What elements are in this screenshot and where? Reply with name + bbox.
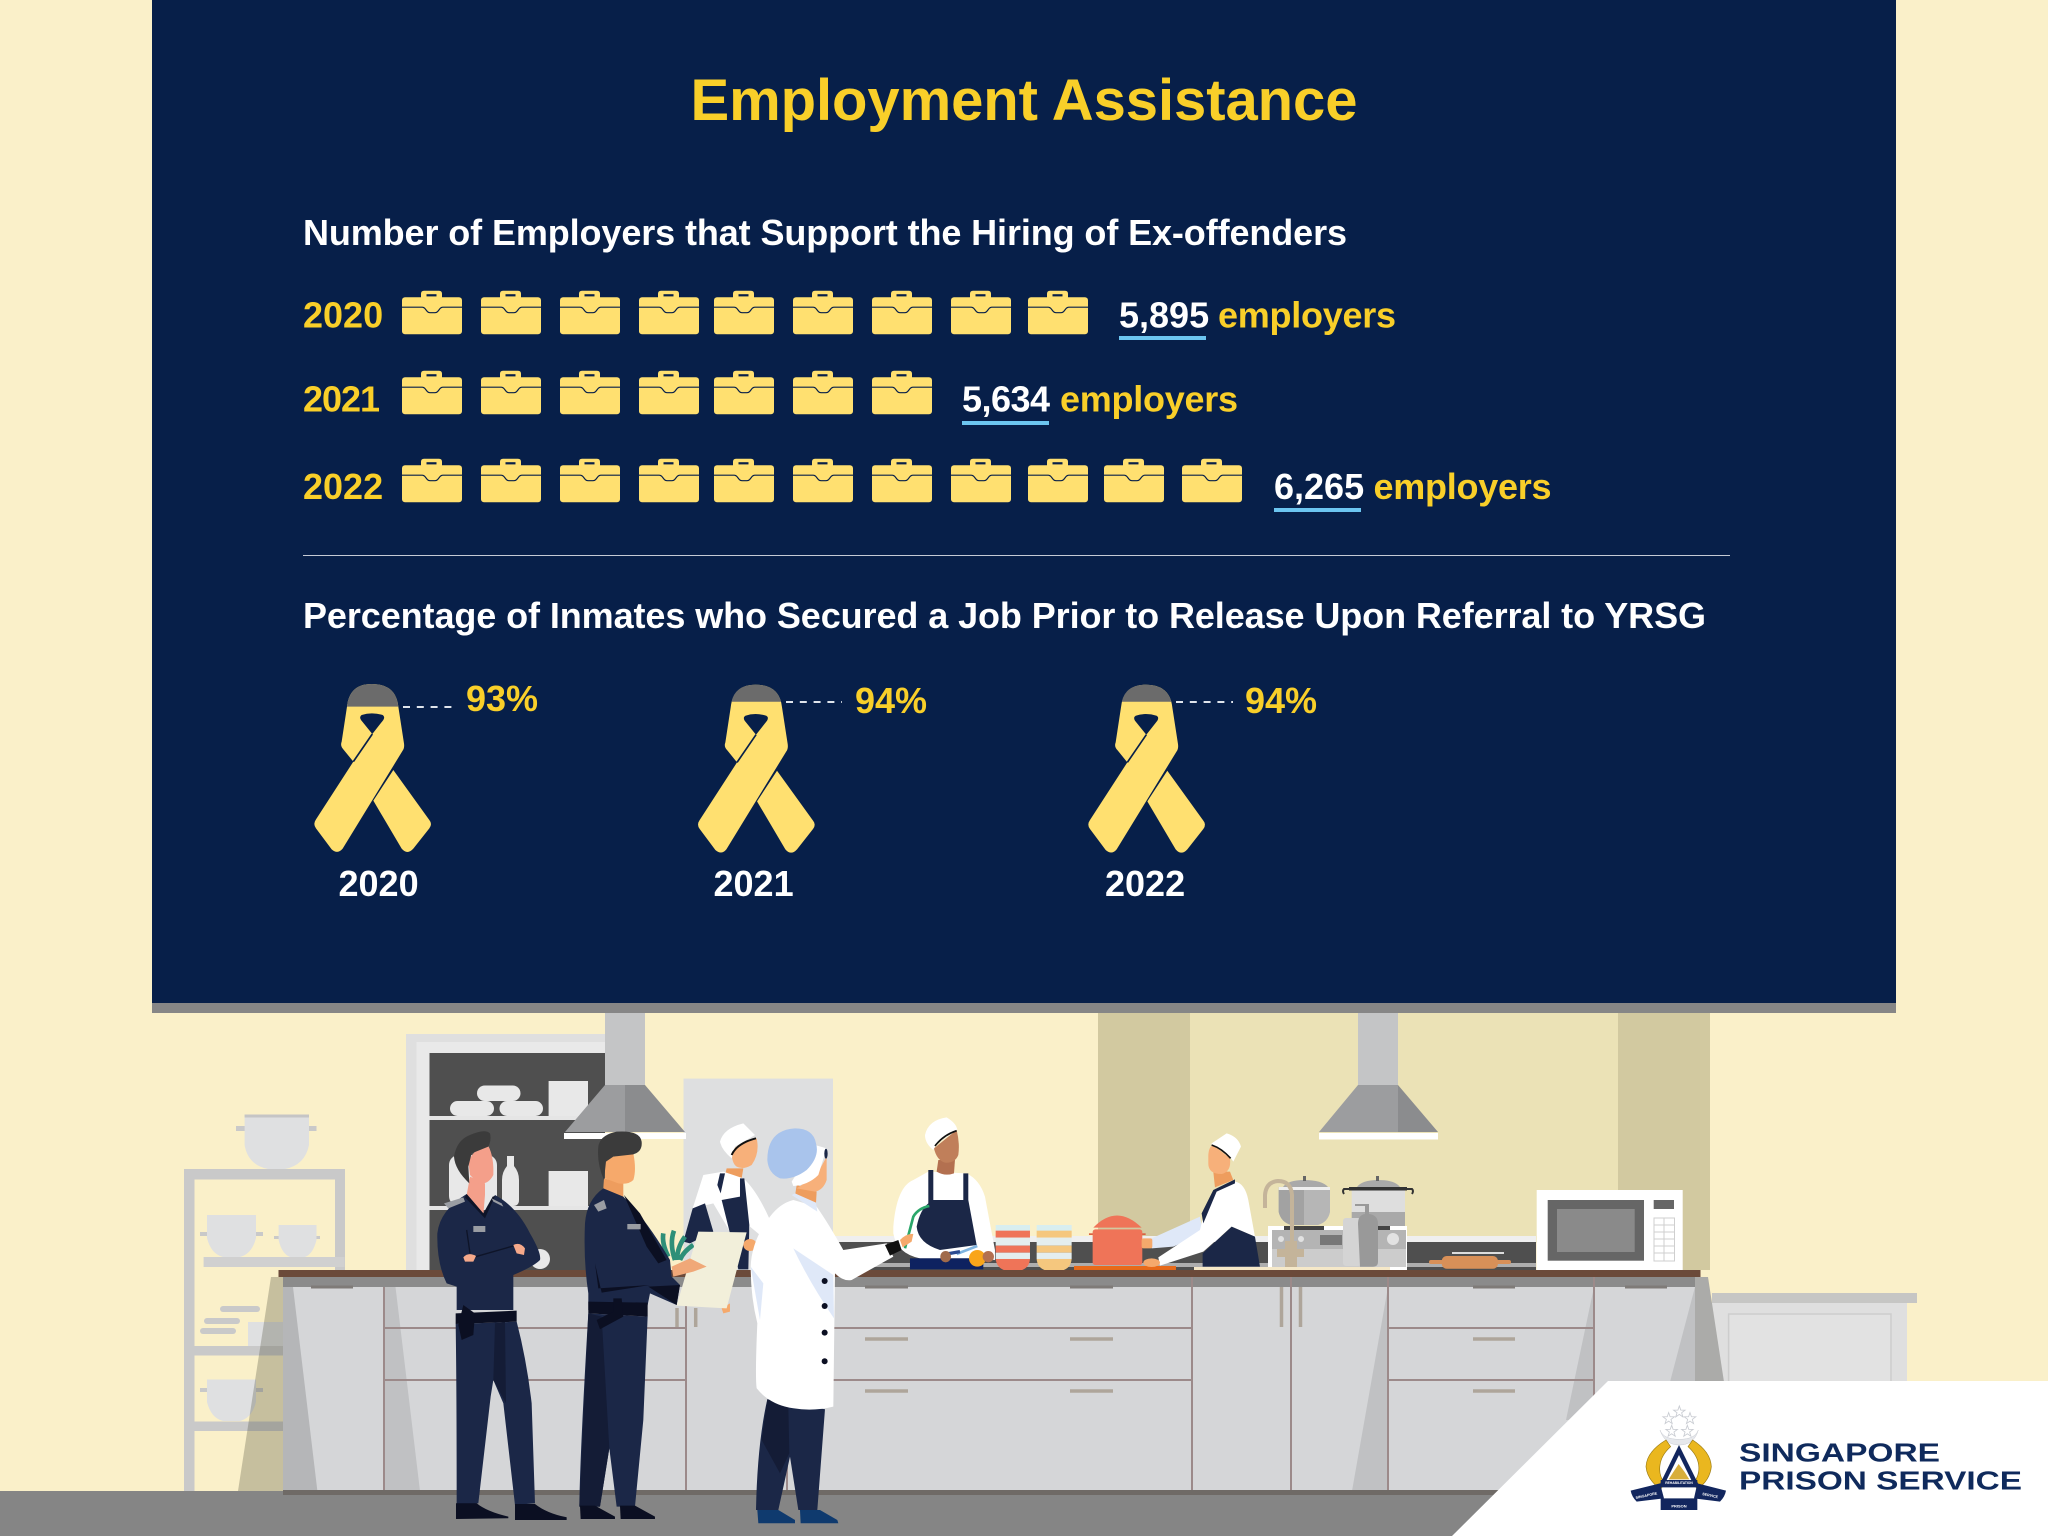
- value 2022: 6,265: [1274, 466, 1364, 507]
- panel: employment assistance: [152, 0, 1896, 1013]
- organisation name: PRISON SERVICE: [1739, 1467, 2022, 1495]
- year 2022: 2022: [1105, 863, 1185, 904]
- prison officer with crossed arms: [437, 1131, 567, 1520]
- chef middle at counter: [893, 1117, 995, 1269]
- head chef in white coat: [751, 1128, 913, 1523]
- wall section: [1190, 1013, 1618, 1243]
- icon: ribbon 2021: [698, 685, 815, 853]
- crest motto: REHABILITATION: [1665, 1481, 1693, 1485]
- organisation name: SINGAPORE: [1739, 1440, 1940, 1468]
- emblem: singapore prison service crest: [1631, 1406, 1726, 1510]
- left shelving unit: [184, 1114, 345, 1491]
- icon: ribbon 2022: [1088, 685, 1205, 853]
- ribbon 2021: [698, 680, 927, 904]
- stove and pots: [1268, 1176, 1413, 1270]
- title: Employment Assistance: [690, 68, 1358, 133]
- percentage 2020: 93%: [466, 678, 538, 719]
- value 2020: 5,895: [1119, 294, 1209, 336]
- year 2020: 2020: [338, 863, 419, 904]
- faucet: [1265, 1181, 1304, 1268]
- ribbon 2022: [1088, 680, 1317, 904]
- crest banner bottom: PRISON: [1671, 1503, 1687, 1508]
- chef left at counter: [683, 1123, 770, 1269]
- door behind chef: [684, 1079, 833, 1271]
- kitchen hood left: [564, 1013, 686, 1139]
- row: 2020 employers: [303, 291, 1396, 340]
- year label 2020: 2020: [303, 294, 383, 336]
- counter sink plate: [1194, 1267, 1390, 1270]
- backsplash: [833, 1236, 1536, 1270]
- kitchen counter: [238, 1270, 1917, 1491]
- microwave: [1537, 1190, 1683, 1270]
- prison officer holding clipboard: [579, 1131, 707, 1519]
- heading: number of employers: Number of Employers that Support the Hiring of Ex-offenders: [303, 212, 1347, 253]
- yellow bowl stack: [1037, 1225, 1072, 1271]
- percentage 2022: 94%: [1245, 680, 1317, 721]
- wall pillar left: [1098, 1013, 1190, 1238]
- clipboard: [677, 1232, 747, 1313]
- icon: ribbon 2020: [314, 684, 431, 852]
- floor: [0, 1490, 2048, 1536]
- year label 2021: 2021: [303, 378, 380, 420]
- underline 2020: [1119, 336, 1206, 340]
- red bowl stack: [996, 1225, 1030, 1271]
- underline 2021: [962, 421, 1049, 425]
- unit 2022: employers: [1374, 466, 1552, 507]
- organisation name: [1739, 1440, 2022, 1495]
- dashed leader 2020: [403, 706, 458, 708]
- kitchen hood right: [1319, 1013, 1438, 1140]
- percentage 2021: 94%: [855, 680, 927, 721]
- underline 2022: [1274, 508, 1361, 512]
- year 2021: 2021: [714, 863, 794, 904]
- row: 2021 employers: [303, 371, 1238, 425]
- cabinet at right wall: [1695, 1277, 1917, 1382]
- orange pot: [1074, 1215, 1176, 1270]
- crest banner left: SINGAPORE: [1635, 1491, 1658, 1500]
- ribbon 2020: [314, 678, 538, 904]
- chef right at counter: [1142, 1133, 1260, 1267]
- rolling pin: [1429, 1252, 1511, 1269]
- year label 2022: 2022: [303, 466, 383, 507]
- briefcase icons 2022: [402, 459, 1242, 502]
- dashed leader 2022: [1176, 701, 1233, 703]
- heading: percentage of inmates: Percentage of Inmates who Secured a Job Prior to Release Upon Referral to YRSG: [303, 595, 1706, 636]
- cupboard with dishes: [406, 1034, 605, 1270]
- crest banner right: SERVICE: [1702, 1492, 1719, 1499]
- wall pillar right: [1618, 1013, 1710, 1270]
- briefcase icons 2021: [402, 371, 932, 414]
- vegetables: [663, 1231, 693, 1260]
- unit 2020: employers: [1218, 294, 1396, 336]
- soap bottles: [1343, 1204, 1378, 1267]
- value 2021: 5,634: [962, 378, 1050, 420]
- briefcase icons 2020: [402, 291, 1088, 334]
- unit 2021: employers: [1060, 378, 1238, 420]
- kitchen scene: [0, 1013, 2048, 1536]
- logo panel: [1452, 1381, 2048, 1536]
- dashed leader 2021: [786, 701, 842, 703]
- row: 2022 employers: [303, 459, 1552, 512]
- bowls and orange pot: [996, 1215, 1176, 1271]
